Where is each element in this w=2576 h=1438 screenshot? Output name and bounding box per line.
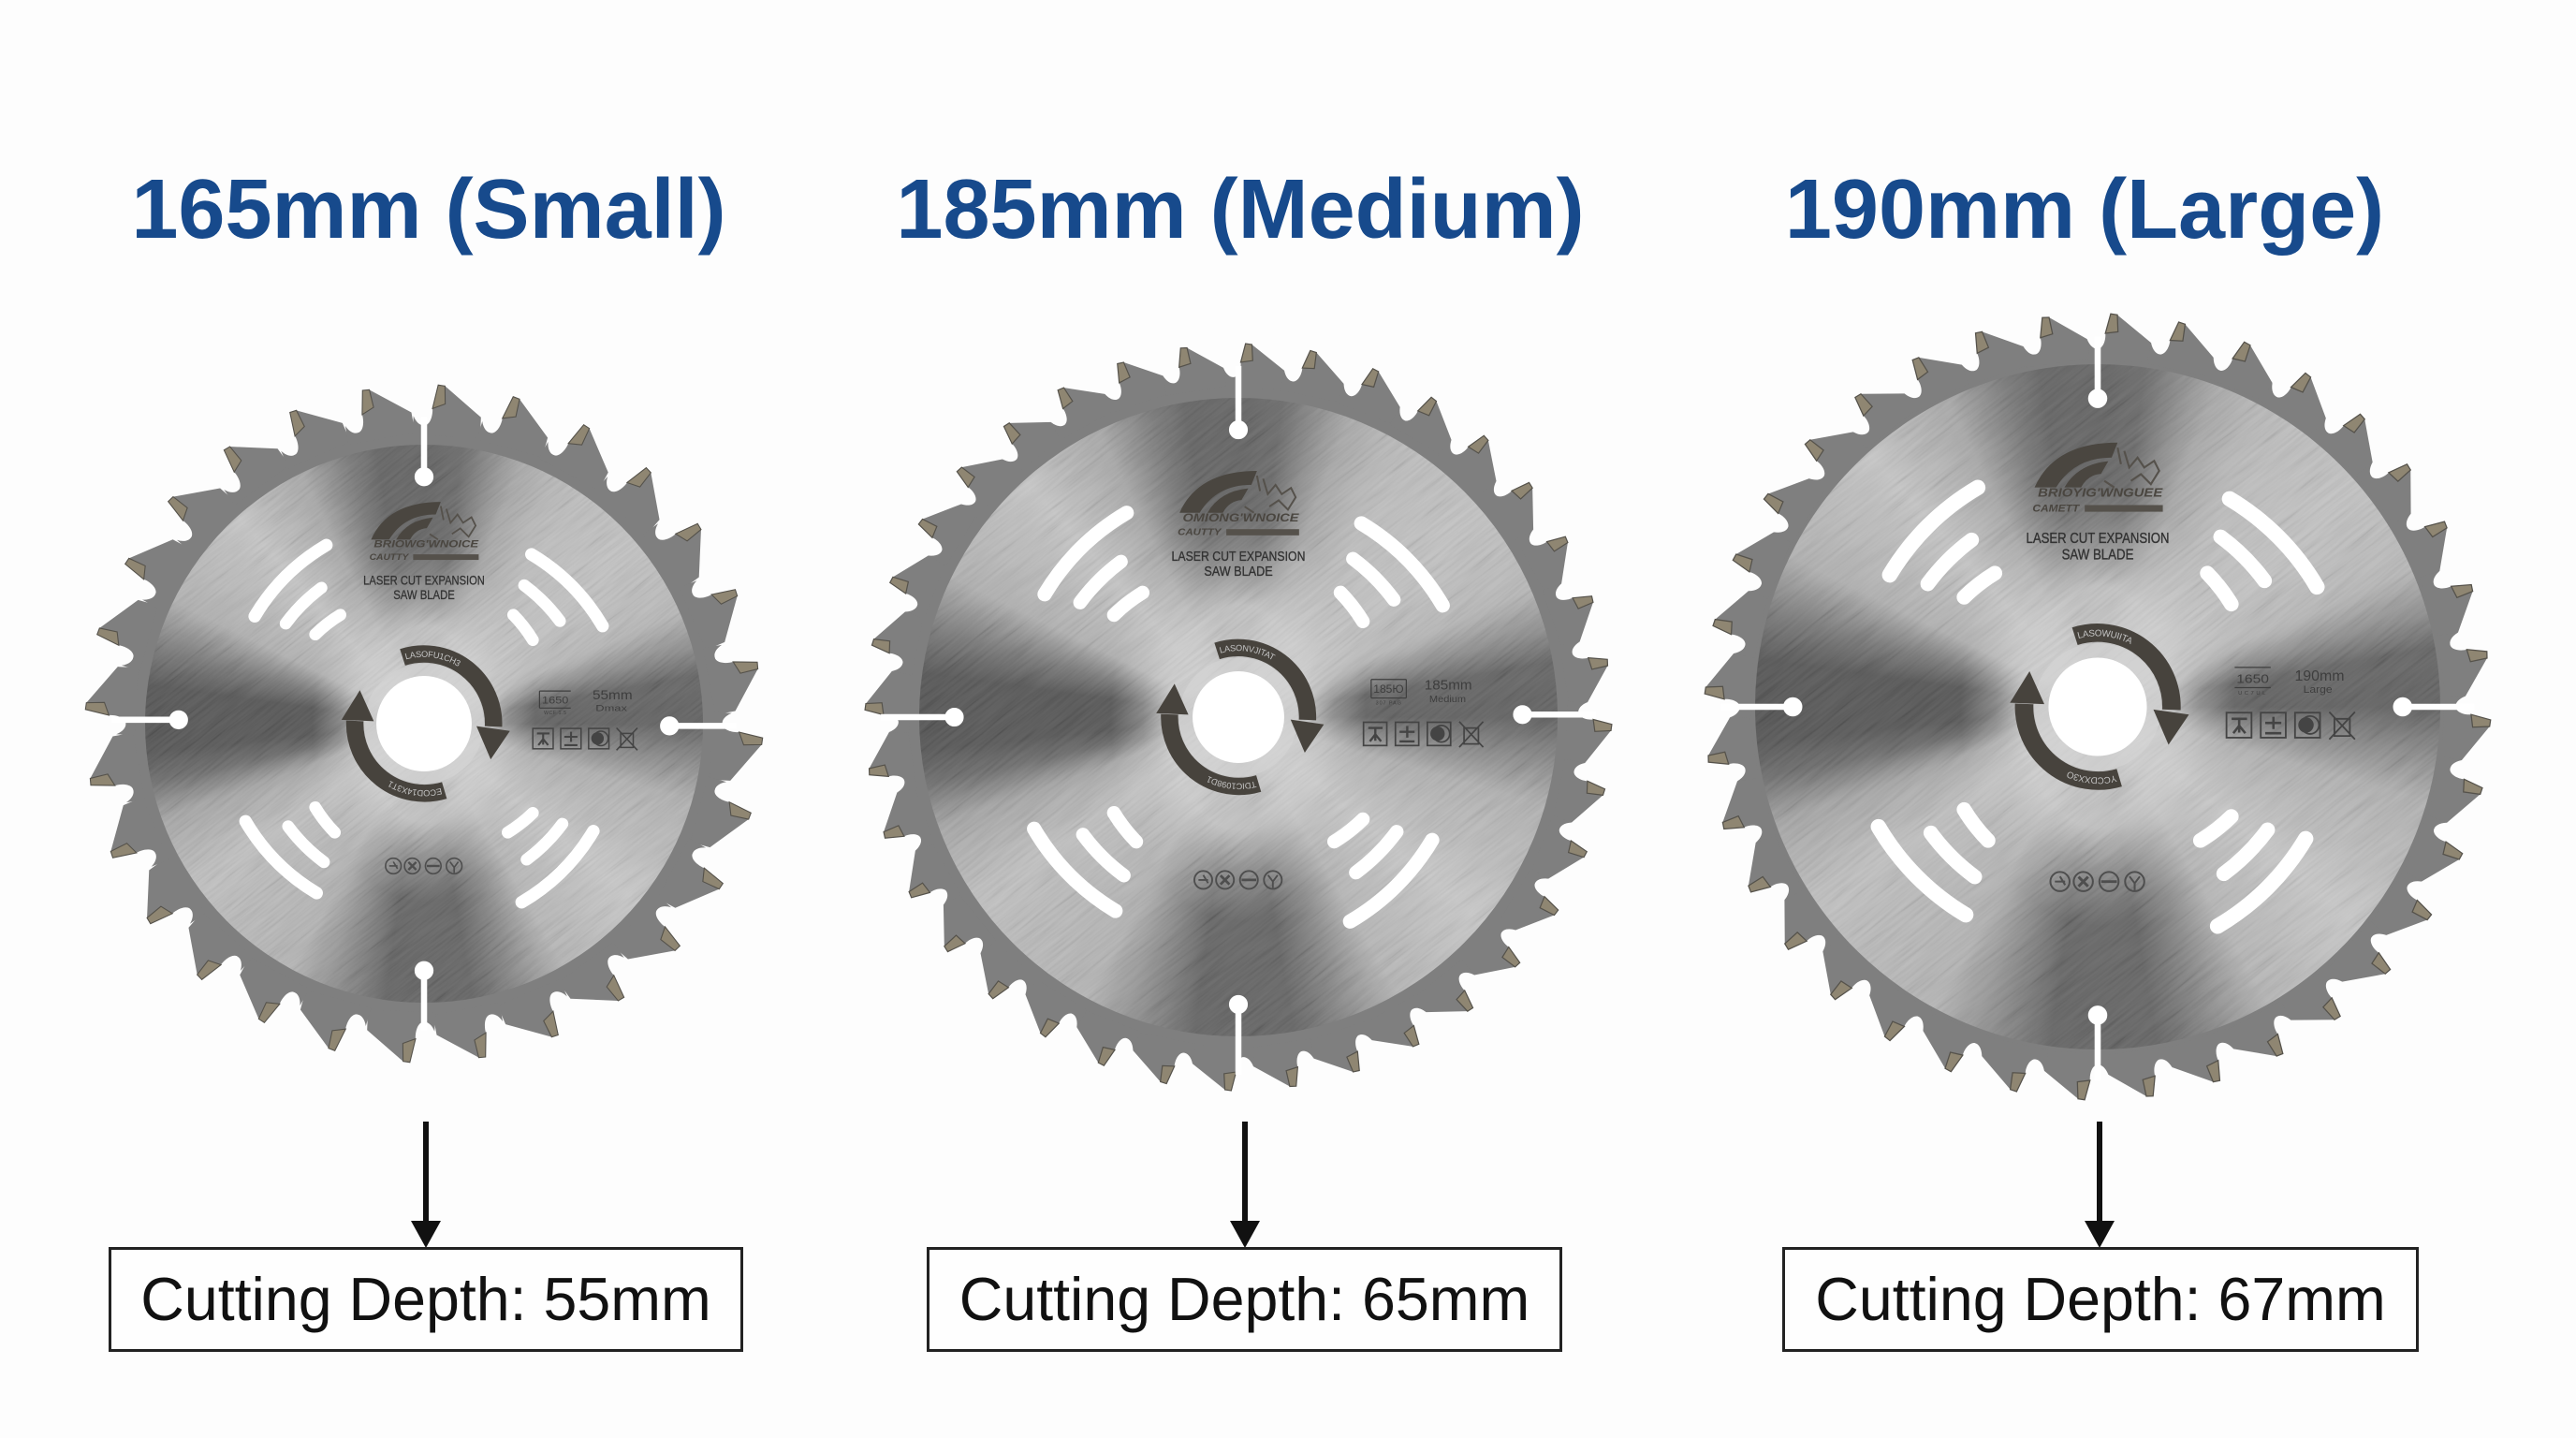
size specification: 1650 (2236, 672, 2269, 685)
expansion slots (1879, 488, 2317, 926)
arrow: large blade to depth (2085, 1122, 2115, 1247)
blade markings (1738, 347, 2457, 1066)
expansion slits (1720, 337, 2475, 1080)
saw blade: 165mm small (84, 384, 764, 1064)
blade markings (120, 424, 726, 1022)
saw blade: 185mm medium (864, 322, 2467, 1093)
hub with rotation arrows (2010, 624, 2188, 790)
expansion slits (111, 417, 737, 1031)
hub with rotation arrows: LASOWUIITA (2078, 629, 2131, 644)
product text: SAW BLADE (2062, 547, 2133, 563)
product text (1172, 550, 1305, 580)
product text: LASER CUT EXPANSION (1172, 550, 1305, 565)
product text (363, 574, 485, 602)
title: 165mm (Small): 165mm (Small) (131, 163, 726, 257)
safety icons bottom (386, 858, 462, 873)
product text: LASER CUT EXPANSION (363, 574, 485, 588)
brushed metal disk (145, 445, 703, 1003)
size specification (1371, 679, 1472, 707)
safety icons right (533, 727, 637, 750)
size specification: 185mm (1425, 679, 1472, 694)
brushed metal disk (1755, 364, 2440, 1049)
hub with rotation arrows (1156, 638, 1324, 796)
size specification (2234, 668, 2345, 697)
callout: cutting depth 67mm: Cutting Depth: 67mm (1815, 1266, 2386, 1333)
product text: SAW BLADE (393, 588, 455, 602)
safety icons bottom (1194, 871, 1281, 888)
safety icons bottom (2050, 872, 2144, 891)
hub with rotation arrows (341, 645, 510, 802)
brushed metal disk (919, 398, 1558, 1036)
callout: cutting depth 67mm (1782, 1247, 2419, 1352)
callout: cutting depth 65mm (927, 1247, 1562, 1352)
size specification: Medium (1429, 695, 1466, 705)
blade markings (881, 322, 2467, 1093)
safety icons right (1364, 722, 1484, 747)
size specification: 190mm (2294, 668, 2345, 684)
expansion slots (1034, 513, 1442, 921)
size specification: 55mm (593, 688, 633, 702)
size specification: UC7UL (2238, 691, 2266, 697)
hub with rotation arrows: YCCDXX3O (2067, 771, 2117, 785)
product text: SAW BLADE (1204, 565, 1273, 580)
size specification: 1650 (542, 696, 568, 707)
safety icons right (2227, 712, 2355, 740)
callout: cutting depth 55mm: Cutting Depth: 55mm (140, 1266, 711, 1333)
arrow: medium blade to depth (1230, 1122, 1260, 1247)
title: 190mm (Large): 190mm (Large) (1785, 163, 2384, 257)
size specification: Dmax (595, 703, 627, 713)
brand logo: BRIOWG'WNOICE (373, 539, 479, 550)
callout: cutting depth 55mm (109, 1247, 743, 1352)
size specification: 185Ю (1373, 684, 1404, 696)
expansion slots (245, 545, 603, 902)
callout: cutting depth 65mm: Cutting Depth: 65mm (959, 1266, 1530, 1333)
size specification: 307 PAG (1376, 701, 1401, 707)
hub with rotation arrows: TDIC1098D1 (1208, 776, 1256, 790)
hub with rotation arrows: LASONVJITAT (1219, 644, 1276, 659)
brand logo: BRIOYIG'WNGUEE (2038, 486, 2164, 500)
arrow: small blade to depth (411, 1122, 441, 1247)
blade rim and teeth (1704, 313, 2492, 1101)
brand logo: CAUTTY (370, 552, 409, 562)
brand logo (2032, 443, 2164, 514)
brand logo (370, 502, 479, 562)
product text: LASER CUT EXPANSION (2027, 531, 2169, 547)
size specification: Large (2304, 684, 2333, 696)
size specification (539, 688, 633, 716)
title: 185mm (Medium): 185mm (Medium) (896, 163, 1585, 257)
brand logo: CAMETT (2032, 503, 2081, 514)
brand logo (1178, 471, 1300, 538)
size specification: WCF 1.5 (544, 711, 566, 716)
hub with rotation arrows: LASOFU1CH3 (404, 651, 461, 667)
hub with rotation arrows: ECOD14X3T1 (388, 781, 442, 796)
brand logo: OMIONG'WNOICE (1182, 511, 1300, 524)
brand logo: CAUTTY (1178, 528, 1222, 538)
saw blade: 190mm large (1704, 313, 2492, 1101)
blade rim and teeth (84, 384, 764, 1064)
blade rim and teeth (864, 343, 1613, 1092)
expansion slits (881, 366, 1596, 1075)
product text (2027, 531, 2169, 563)
